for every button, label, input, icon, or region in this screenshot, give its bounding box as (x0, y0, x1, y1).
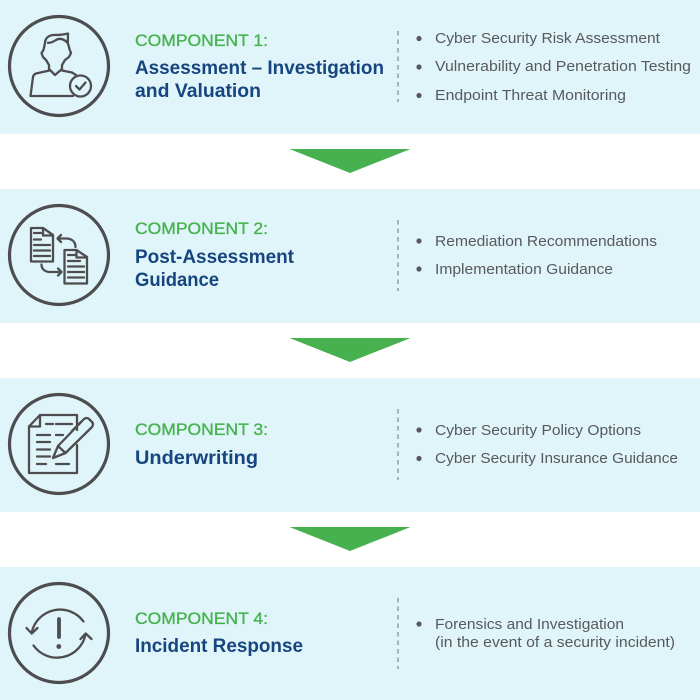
icon: person with check mark (10, 16, 108, 116)
bullet list: component 1: Endpoint Threat Monitoring (435, 87, 626, 104)
bullet list: component 1: Cyber Security Risk Assessment (435, 30, 661, 47)
title: component 1: Assessment – Investigation (135, 57, 384, 79)
label: component 3: COMPONENT 3: (135, 420, 268, 439)
bullet list: component 1: Vulnerability and Penetration Testing (435, 58, 691, 75)
panel: component 3 (0, 378, 700, 512)
label: component 1: COMPONENT 1: (135, 31, 268, 50)
label: component 4: COMPONENT 4: (135, 609, 268, 628)
panel: component 4 (0, 567, 700, 700)
title: component 4: Incident Response (135, 635, 303, 657)
bullet list: component 3: Cyber Security Insurance Guidance (435, 450, 678, 467)
bullet list: component 4: (in the event of a security incident) (435, 634, 675, 651)
title: component 1 (135, 57, 384, 102)
label: component 2: COMPONENT 2: (135, 219, 268, 238)
title: component 2: Guidance (135, 269, 219, 291)
bullet list: component 2 (416, 233, 657, 278)
bullet list: component 3: Cyber Security Policy Options (435, 422, 641, 439)
arrow: down to component 3 (290, 338, 410, 362)
arrow: down to component 2 (290, 149, 410, 173)
panel: component 1 (0, 0, 700, 134)
bullet list: component 2: Implementation Guidance (435, 261, 613, 278)
bullet list: component 3 (416, 422, 678, 467)
bullet list: component 2: Remediation Recommendations (435, 233, 657, 250)
title: component 2: Post-Assessment (135, 246, 294, 268)
bullet list: component 4: Forensics and Investigation (435, 616, 624, 633)
title: component 1: and Valuation (135, 80, 261, 102)
icon: document and pencil (10, 394, 108, 494)
panel: component 2 (0, 189, 700, 323)
bullet list: component 1 (416, 30, 691, 104)
arrow: down to component 4 (290, 527, 410, 551)
title: component 2 (135, 246, 294, 291)
title: component 3: Underwriting (135, 447, 258, 469)
bullet list: component 4 (416, 616, 675, 651)
icon: incident alert cycle (10, 584, 108, 682)
icon: exchanging documents (10, 206, 108, 304)
